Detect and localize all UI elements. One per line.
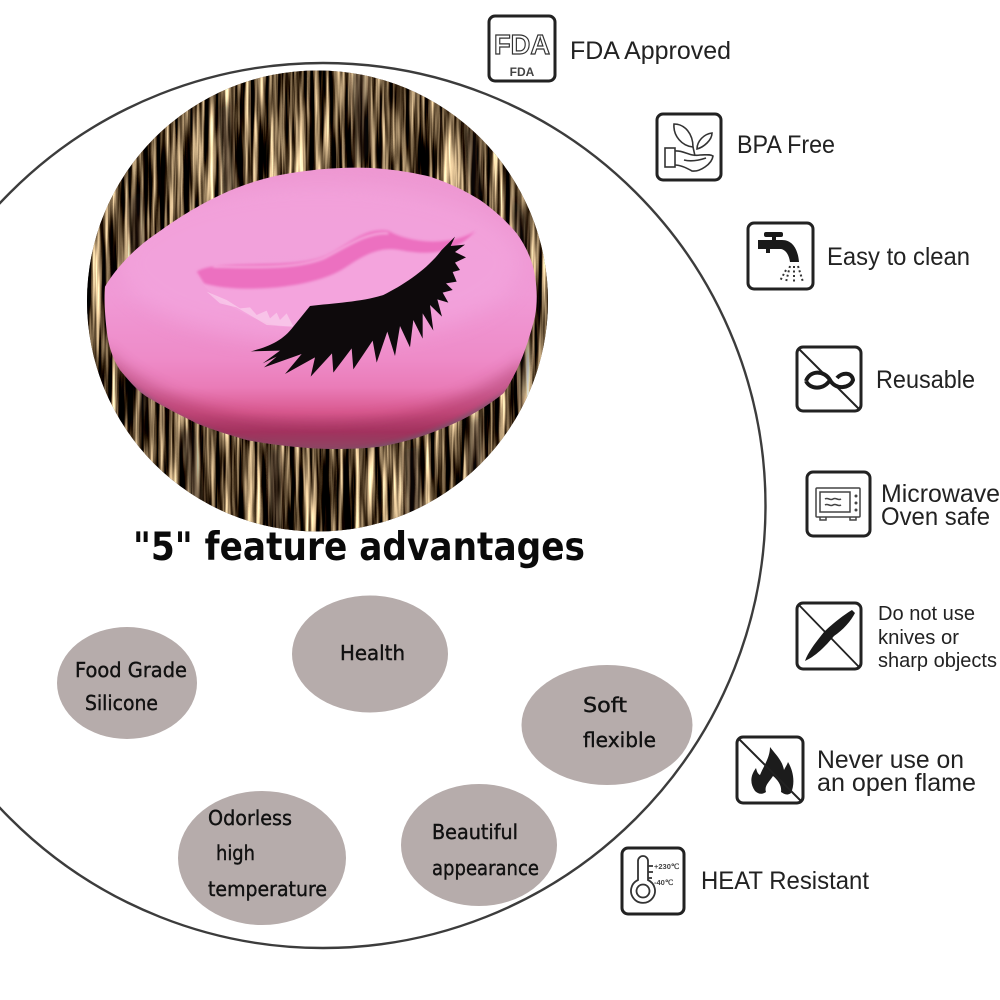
badge: Food Grade Silicone [57, 627, 197, 739]
icon: crossed knife [797, 603, 861, 669]
feature: Do not use knives [797, 603, 997, 672]
icon: thermometer: -40℃ [654, 878, 674, 887]
badge: Odorless high temperature [178, 791, 346, 925]
small lash imprint [207, 292, 293, 327]
feature: Microwave Oven safe [807, 472, 1000, 536]
badge: Beautiful appearance: appearance [432, 856, 539, 880]
feature: BPA Free [657, 114, 835, 180]
feature: Reusable: Reusable [876, 366, 975, 394]
badge: Soft flexible: flexible [583, 728, 656, 752]
badge: Soft flexible: Soft [583, 693, 627, 717]
icon: FDA [489, 16, 555, 81]
feature: Easy to clean [748, 223, 970, 289]
feature: Easy to clean: Easy to clean [827, 243, 970, 271]
wood background [87, 70, 549, 532]
badge: Food Grade Silicone: Food Grade [75, 658, 187, 682]
label: knives or [878, 627, 959, 649]
icon: crossed infinity [797, 347, 861, 411]
label: an open flame [817, 769, 976, 797]
icon: thermometer: +230℃ [654, 862, 680, 871]
feature: Never use on an open flame [737, 737, 976, 803]
title: "5" feature advantages [133, 525, 585, 570]
badge: Beautiful appearance [401, 784, 557, 906]
label: Never use on [817, 746, 964, 774]
badge: Odorless high temperature: Odorless [208, 806, 292, 830]
feature: FDA Approved [489, 16, 731, 81]
feature: HEAT Resistant: HEAT Resistant [701, 867, 869, 895]
label [878, 603, 997, 672]
badge: Food Grade Silicone: Silicone [85, 691, 158, 715]
icon: microwave [807, 472, 870, 536]
eyelash [251, 237, 466, 377]
feature: BPA Free: BPA Free [737, 131, 835, 159]
icon: tap [748, 223, 813, 289]
icon: thermometer [622, 848, 684, 914]
feature: Reusable [797, 347, 975, 411]
dark lower rim [110, 348, 522, 449]
icon: plant in hand [657, 114, 721, 180]
label: sharp objects [878, 650, 997, 672]
badge: Health [292, 596, 448, 712]
badge: Soft flexible [522, 665, 692, 785]
label [817, 746, 976, 797]
label [881, 480, 1000, 531]
product photo: pink eyelash mold on wood [87, 70, 549, 532]
feature: FDA Approved: FDA Approved [570, 37, 731, 65]
icon: FDA: FDA [510, 65, 535, 79]
badge: Odorless high temperature: temperature [208, 877, 327, 901]
icon: crossed flame [737, 737, 803, 803]
pink silicone mold [103, 168, 537, 460]
large outline circle [0, 63, 766, 948]
eye recess [197, 230, 477, 327]
label: Oven safe [881, 503, 990, 531]
label: Do not use [878, 603, 975, 625]
feature: HEAT Resistant [622, 848, 869, 914]
badge: Health: Health [340, 641, 405, 665]
badge: Beautiful appearance: Beautiful [432, 820, 518, 844]
badge: Odorless high temperature: high [216, 841, 255, 865]
icon: FDA: FDA [494, 29, 550, 60]
label: Microwave [881, 480, 1000, 508]
